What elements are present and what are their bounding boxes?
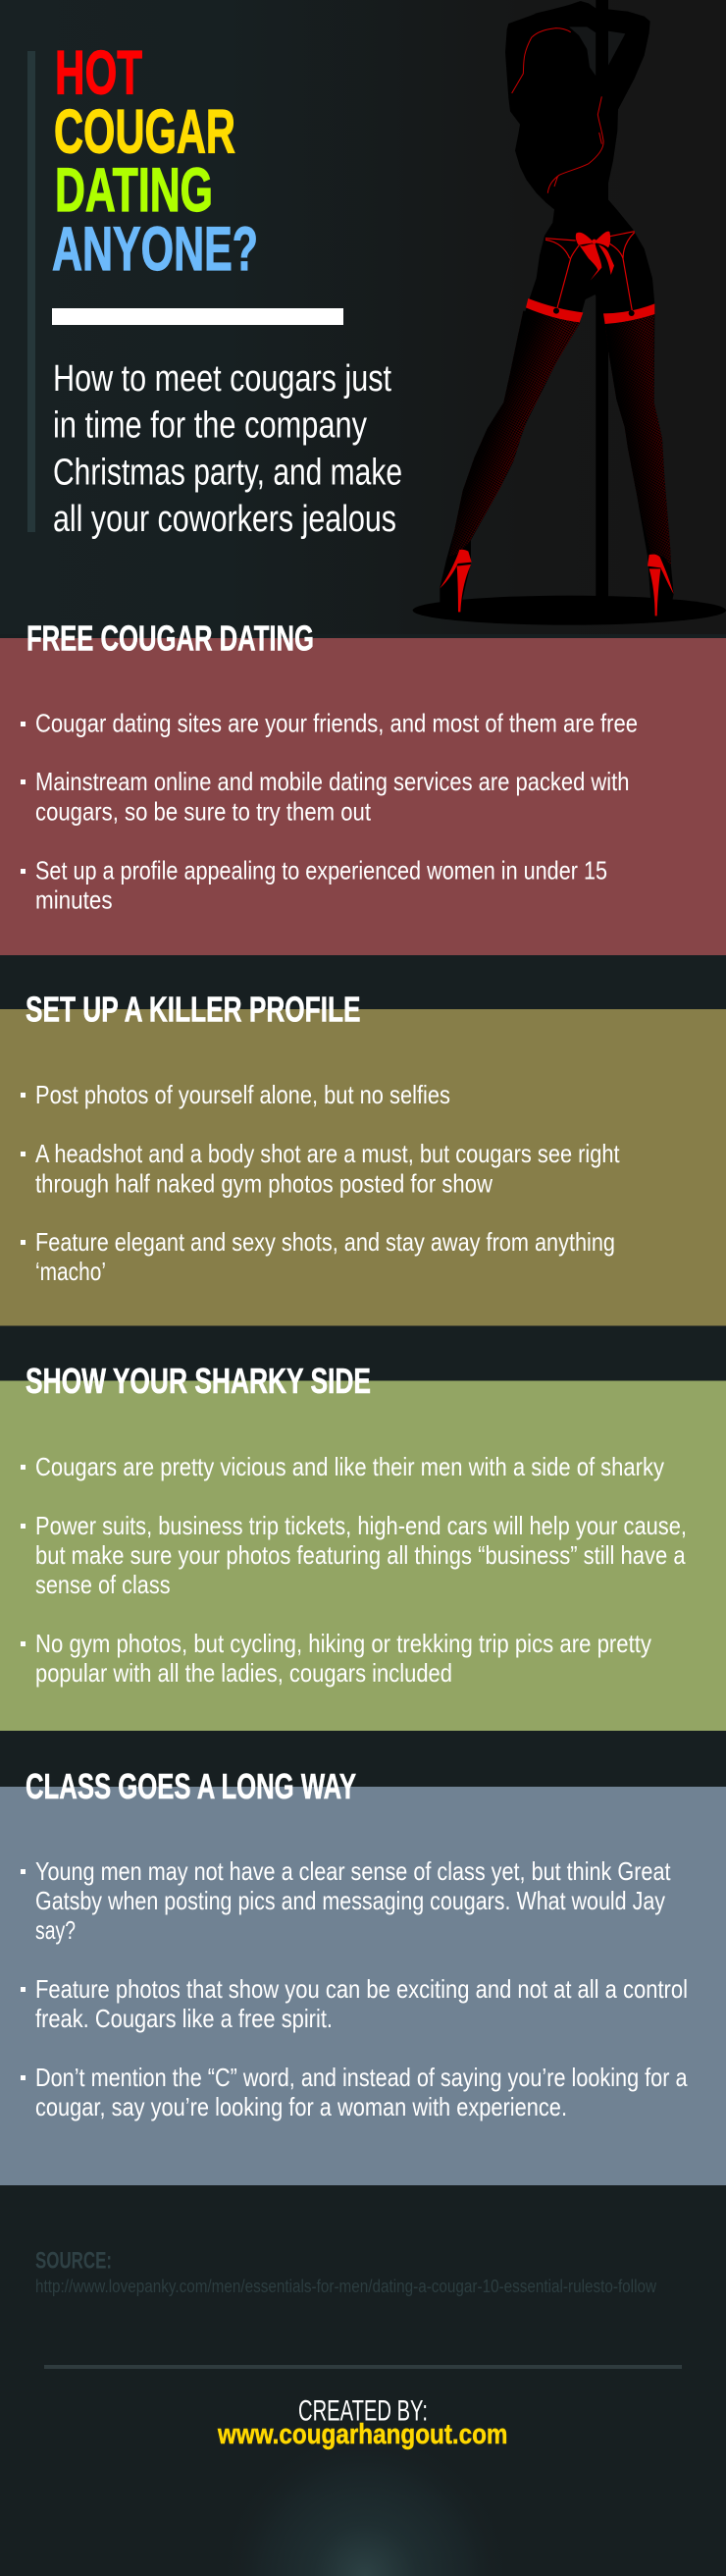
left shoe upper — [440, 550, 472, 588]
garter clip left — [553, 308, 559, 314]
bullet 3 — [21, 1629, 651, 1688]
subtitle: How to meet cougars just — [53, 358, 391, 400]
heading: CLASS GOES A LONG WAY — [26, 1766, 356, 1806]
bullet 2: through half naked gym photos posted for show — [35, 1168, 493, 1198]
header background — [0, 0, 726, 634]
bottom glow — [196, 2425, 534, 2576]
bullet 2 — [21, 1974, 688, 2033]
illustration: pole dancer silhouette — [413, 0, 726, 625]
credit: www.cougarhangout.com — [217, 2419, 508, 2450]
stocking band left — [526, 298, 583, 322]
bullet 3: popular with all the ladies, cougars included — [35, 1658, 452, 1688]
subtitle — [53, 358, 402, 540]
bullet 1 — [21, 1856, 671, 1945]
right shoe upper — [648, 555, 674, 594]
fishnet stocking right — [605, 312, 671, 566]
bullet 1: Cougar dating sites are your friends, and most of them are free — [35, 709, 638, 738]
bullet 2: Mainstream online and mobile dating services are packed with — [35, 767, 630, 796]
bullet 2: freak. Cougars like a free spirit. — [35, 2004, 333, 2033]
title divider — [52, 308, 343, 325]
title: DATING — [55, 156, 213, 225]
bullet 3 — [21, 1227, 615, 1286]
panel: set up a killer profile — [0, 990, 726, 1325]
subtitle: all your coworkers jealous — [53, 499, 396, 540]
bullet 3 — [21, 2063, 688, 2121]
gap between head and arm — [569, 27, 596, 76]
fishnet stocking left — [449, 311, 581, 557]
floor shadow — [413, 596, 726, 625]
bullet 1: Post photos of yourself alone, but no selfies — [35, 1080, 450, 1109]
body silhouette — [440, 1, 674, 616]
bullet 3: Feature elegant and sexy shots, and stay away from anything — [35, 1227, 615, 1257]
right shoe heel — [649, 568, 660, 616]
bullet 2: sense of class — [35, 1570, 171, 1599]
accent bar — [27, 51, 35, 532]
pole — [596, 0, 608, 597]
bullet 2: cougars, so be sure to try them out — [35, 797, 372, 827]
heading: SET UP A KILLER PROFILE — [26, 990, 361, 1030]
bullet 2 — [21, 1139, 620, 1198]
garter belt — [545, 232, 635, 311]
garter clip right — [629, 310, 635, 316]
title: HOT — [55, 39, 142, 108]
title: COUGAR — [54, 98, 235, 167]
panel: free cougar dating — [0, 618, 726, 955]
title — [52, 39, 258, 284]
bullet 3 — [21, 856, 607, 915]
red bow — [576, 232, 614, 281]
stocking band right — [603, 303, 654, 324]
bullet 2: A headshot and a body shot are a must, but cougars see right — [35, 1139, 620, 1168]
bullet 3: ‘macho’ — [35, 1257, 106, 1286]
footer divider — [44, 2365, 682, 2369]
gap between pole and arm — [608, 31, 625, 66]
bullet 3: Set up a profile appealing to experienced women in under 15 — [35, 856, 607, 886]
source block: SOURCE: — [35, 2248, 112, 2275]
credit: CREATED BY: — [298, 2395, 428, 2428]
credit — [217, 2395, 508, 2450]
subtitle: in time for the company — [53, 405, 367, 447]
source block — [35, 2248, 657, 2296]
hair highlight lower — [547, 96, 603, 193]
subtitle: Christmas party, and make — [53, 452, 402, 493]
bullet 3: minutes — [35, 886, 113, 915]
heading: SHOW YOUR SHARKY SIDE — [26, 1361, 371, 1401]
bullet 2 — [21, 1511, 687, 1599]
bullet 2 — [21, 767, 630, 827]
title: ANYONE? — [52, 215, 258, 284]
left shoe heel — [457, 564, 471, 612]
panel: show your sharky side — [0, 1361, 726, 1731]
hair highlight upper — [512, 28, 571, 93]
bullet 1: say? — [35, 1915, 76, 1945]
heading: FREE COUGAR DATING — [26, 618, 314, 658]
bullet 3: cougar, say you’re looking for a woman with experience. — [35, 2092, 567, 2121]
panel: class goes a long way — [0, 1766, 726, 2185]
